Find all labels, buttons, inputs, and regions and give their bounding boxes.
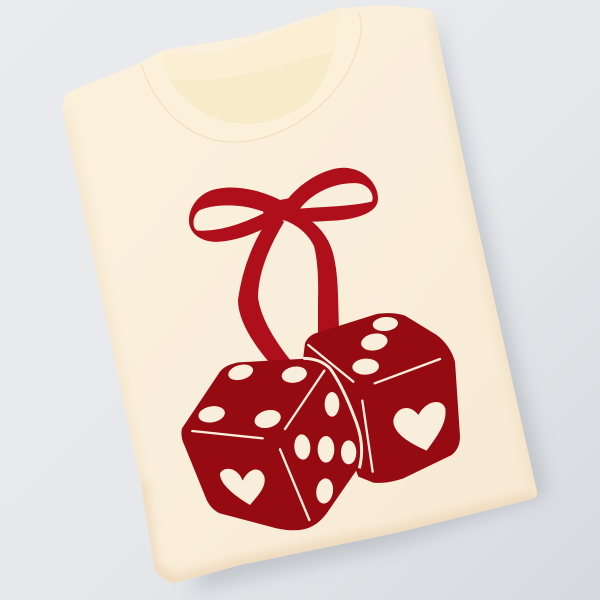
left die body xyxy=(181,359,362,530)
right die top pips xyxy=(352,316,399,375)
ribbon bow and tails xyxy=(189,168,378,361)
back of neck band xyxy=(163,8,339,80)
dice xyxy=(181,313,460,530)
shirt edge shading xyxy=(64,15,537,584)
right die edge lines xyxy=(308,345,440,472)
right die body xyxy=(303,313,460,483)
bow loops xyxy=(189,168,378,242)
neck rib band xyxy=(142,8,361,142)
gap between dice xyxy=(303,358,362,468)
shirt shadow xyxy=(190,20,548,592)
collar stitching xyxy=(142,13,361,142)
right ribbon tail xyxy=(284,214,339,336)
left die edge lines xyxy=(192,371,324,520)
left ribbon tail xyxy=(238,214,291,361)
left die xyxy=(181,358,362,530)
right die xyxy=(303,313,460,483)
shirt body xyxy=(63,5,537,583)
collar xyxy=(142,8,361,142)
inner neck opening xyxy=(171,51,333,124)
left die heart xyxy=(220,469,265,505)
right die heart xyxy=(393,402,446,451)
left die pips xyxy=(197,362,356,505)
